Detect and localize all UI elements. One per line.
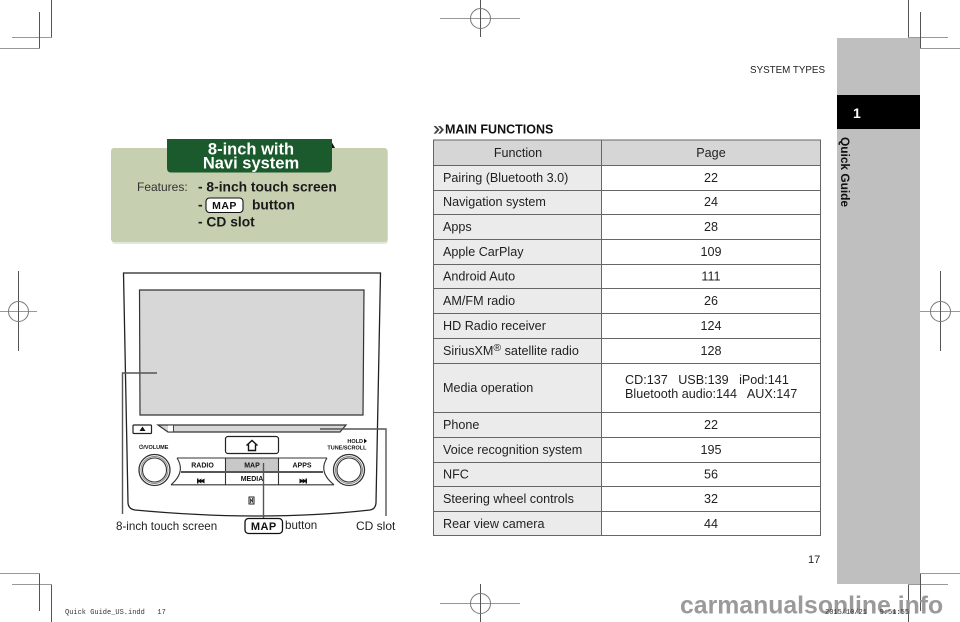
button bank: MAP (244, 462, 260, 470)
NFC mark (249, 497, 254, 504)
illustration: head unit (124, 273, 380, 516)
table text: Media operation (443, 381, 533, 395)
caption: CD slot: CD slot (356, 519, 396, 533)
table text: 195 (700, 443, 722, 457)
table text: 44 (704, 517, 718, 531)
button bank: MEDIA (241, 476, 263, 483)
button bank: APPS (292, 462, 312, 470)
table text: ® (493, 342, 501, 354)
card title tab: Navi system (203, 154, 299, 172)
table text: 26 (704, 294, 718, 308)
sidebar tab (837, 38, 920, 584)
button bank: RADIO (191, 462, 214, 470)
CD slot (158, 425, 346, 432)
page heading: system types: SYSTEM TYPES (750, 65, 825, 76)
table text: 128 (700, 344, 722, 358)
button bank (171, 458, 334, 485)
tune knob (334, 454, 364, 486)
table text: Steering wheel controls (443, 492, 574, 506)
unit outer frame (124, 273, 380, 516)
print slug: file name: Quick Guide_US.indd 17 (65, 609, 166, 617)
table text: Navigation system (443, 195, 546, 209)
table text: 32 (704, 492, 718, 506)
table text: 22 (704, 171, 718, 185)
caption: MAP button (245, 518, 317, 534)
table: main functions (433, 140, 821, 536)
table text: Phone (443, 418, 479, 432)
panel: feature card (111, 139, 388, 244)
table text: Function (494, 146, 542, 160)
card title tab (167, 139, 335, 172)
features list: Features: (137, 180, 188, 194)
caption: touch screen: 8-inch touch screen (116, 520, 217, 533)
features list: - CD slot (198, 214, 255, 230)
eject button (133, 425, 152, 434)
table text: SiriusXM (443, 344, 493, 358)
table text: AM/FM radio (443, 294, 515, 308)
table text: 111 (701, 270, 721, 284)
caption: MAP button: MAP (251, 521, 277, 533)
table text: Page (696, 146, 726, 160)
features list: - (198, 198, 203, 212)
caption: MAP button: button (285, 519, 317, 532)
table text: 124 (700, 319, 722, 333)
table text: NFC (443, 468, 469, 482)
table text: 56 (704, 468, 718, 482)
leader lines (122, 373, 386, 518)
home button (226, 436, 278, 454)
features list (137, 180, 337, 230)
table heading: MAIN FUNCTIONS (445, 122, 553, 136)
table text: Apple CarPlay (443, 245, 524, 259)
header row (433, 140, 821, 165)
function column fill (433, 165, 601, 535)
table text: Apps (443, 220, 472, 234)
table text: 109 (700, 245, 722, 259)
control labels: ⏻/VOLUME (139, 444, 169, 451)
table text: satellite radio (501, 344, 579, 358)
table text: Pairing (Bluetooth 3.0) (443, 171, 568, 185)
control labels: TUNE/SCROLL (327, 446, 367, 452)
sidebar label: Quick Guide (838, 137, 852, 207)
MAP button icon (206, 198, 243, 212)
control labels: HOLD (347, 439, 363, 445)
table text (443, 146, 797, 531)
table text: 24 (704, 195, 718, 209)
table text: Bluetooth audio:144 AUX:147 (625, 387, 797, 401)
card title tab: 8-inch with (208, 140, 294, 158)
features list: - 8-inch touch screen (198, 180, 337, 194)
features list: button (252, 198, 295, 212)
volume knob (139, 454, 170, 486)
table text: 22 (704, 418, 718, 432)
table text: Android Auto (443, 270, 515, 284)
section number: 1 (853, 105, 861, 121)
table text: HD Radio receiver (443, 319, 546, 333)
control labels (139, 438, 367, 452)
table text: Voice recognition system (443, 443, 582, 457)
table text: CD:137 USB:139 iPod:141 (625, 373, 789, 387)
table text: 28 (704, 220, 718, 234)
watermark: carmanualsonline.info (680, 592, 943, 620)
page number: 17 (808, 554, 820, 566)
table grid (433, 140, 821, 536)
print slug: date: 2015/10/21 9:51:55 (825, 609, 909, 617)
table text: Rear view camera (443, 517, 544, 531)
touch screen (140, 290, 364, 415)
MAP button icon: MAP (212, 200, 237, 212)
